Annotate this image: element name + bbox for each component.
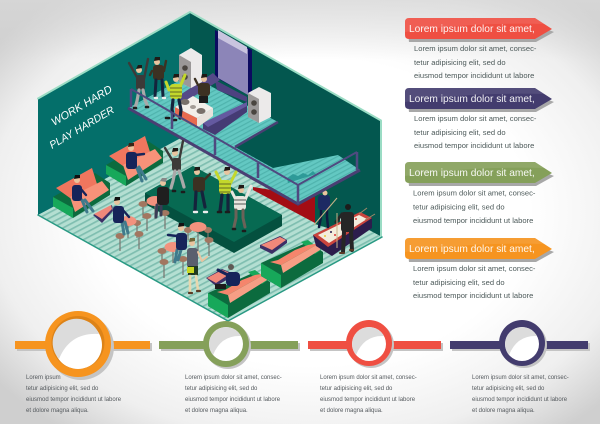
banner: purple — [405, 88, 554, 112]
guest on sofa — [126, 143, 146, 181]
banner text: Lorem ipsum dolor sit amet, consec- — [413, 264, 536, 273]
caption: Lorem ipsum dolor sit amet, consec- — [472, 375, 569, 381]
red under stairs — [253, 187, 315, 223]
caption: Lorem ipsum dolor sit amet, consec- — [320, 375, 417, 381]
caption: et dolore magna aliqua. — [185, 408, 248, 414]
yellow dancer — [216, 167, 236, 212]
banner text: eiusmod tempor incididunt ut labore — [414, 141, 534, 150]
banner text: eiusmod tempor incididunt ut labore — [413, 216, 533, 225]
sofa — [106, 136, 163, 186]
caption: eiusmod tempor incididunt ut labore — [320, 397, 416, 403]
banner text: Lorem ipsum dolor sit amet, consec- — [413, 188, 536, 198]
guest on sofa — [72, 175, 93, 212]
staircase — [287, 171, 316, 183]
sofa — [208, 270, 270, 318]
isometric club room — [38, 12, 382, 321]
café tables and stools — [116, 196, 214, 278]
seated guests — [72, 143, 240, 293]
speaker — [179, 48, 202, 88]
banner text: eiusmod tempor incididunt ut labore — [413, 291, 533, 300]
slogan: WORK HARD — [49, 83, 115, 129]
caption: Lorem ipsum — [26, 375, 61, 381]
caption: eiusmod tempor incididunt ut labore — [472, 397, 568, 403]
dancers on platform — [165, 141, 251, 231]
slogan — [47, 83, 117, 152]
caption: et dolore magna aliqua. — [320, 408, 383, 414]
caption: et dolore magna aliqua. — [26, 408, 89, 414]
caption — [26, 375, 122, 414]
guest at table — [156, 178, 169, 217]
right wall — [190, 12, 382, 237]
banner text: tetur adipisicing elit, sed do — [413, 202, 505, 212]
caption: tetur adipisicing elit, sed do — [320, 386, 393, 392]
brown dancer — [193, 167, 210, 212]
banner: purple: Lorem ipsum dolor sit amet, — [409, 94, 535, 105]
banner text: Lorem ipsum dolor sit amet, consec- — [414, 44, 537, 53]
caption: et dolore magna aliqua. — [472, 408, 535, 414]
banner: orange: Lorem ipsum dolor sit amet, — [409, 244, 535, 255]
banner: red — [405, 18, 554, 42]
caption: eiusmod tempor incididunt ut labore — [185, 397, 281, 403]
standing guest — [187, 238, 207, 293]
banner text — [414, 114, 537, 150]
stage backdrop — [215, 30, 252, 97]
sofa — [53, 168, 110, 218]
slogan: PLAY HARDER — [47, 104, 117, 152]
timeline: green — [159, 321, 300, 369]
dancer in brown — [150, 57, 166, 98]
banner text — [414, 44, 537, 80]
dance platform — [145, 166, 282, 253]
timeline: orange — [15, 311, 152, 380]
left wall — [38, 12, 190, 215]
sofa — [261, 240, 323, 288]
caption: tetur adipisicing elit, sed do — [185, 386, 258, 392]
wall top edge — [38, 12, 381, 236]
banner: orange — [405, 238, 554, 262]
player in doorway — [314, 190, 337, 227]
railing — [131, 89, 357, 204]
banner text: Lorem ipsum dolor sit amet, consec- — [414, 114, 537, 123]
banner: red: Lorem ipsum dolor sit amet, — [409, 24, 535, 35]
caption — [472, 375, 569, 414]
dancers upstairs — [129, 57, 210, 120]
player with cue — [336, 204, 354, 253]
guest seen from behind — [215, 264, 240, 289]
banner text: tetur adipisicing elit, sed do — [414, 128, 506, 137]
dancer in yellow — [166, 74, 185, 120]
floor — [38, 133, 382, 321]
DJ table — [175, 96, 213, 128]
low table — [260, 236, 287, 254]
mezzanine floor and stairs — [128, 75, 360, 204]
dancer in grey — [129, 59, 148, 108]
speaker — [248, 87, 271, 123]
banner text: tetur adipisicing elit, sed do — [413, 278, 505, 287]
caption: Lorem ipsum dolor sit amet, consec- — [185, 375, 282, 381]
banner text — [413, 188, 536, 225]
dancer at back — [195, 74, 210, 103]
caption: tetur adipisicing elit, sed do — [26, 386, 99, 392]
guest at table — [113, 197, 129, 234]
caption — [320, 375, 417, 414]
banner: green — [405, 162, 554, 186]
caption: eiusmod tempor incididunt ut labore — [26, 397, 122, 403]
striped dancer — [232, 185, 251, 231]
timeline: purple — [450, 320, 590, 368]
banner: green: Lorem ipsum dolor sit amet, — [409, 168, 535, 179]
banner text — [413, 264, 536, 300]
pool table — [313, 208, 375, 256]
banner text: tetur adipisicing elit, sed do — [414, 58, 506, 67]
caption — [185, 375, 282, 414]
guest at table — [168, 223, 187, 262]
banner text: eiusmod tempor incididunt ut labore — [414, 71, 534, 80]
dark doorway — [315, 183, 340, 232]
low table — [93, 205, 113, 223]
low table — [206, 269, 232, 286]
timeline: red — [308, 320, 443, 368]
caption: tetur adipisicing elit, sed do — [472, 386, 545, 392]
stage bench — [177, 73, 247, 135]
grey dancer — [165, 141, 184, 192]
